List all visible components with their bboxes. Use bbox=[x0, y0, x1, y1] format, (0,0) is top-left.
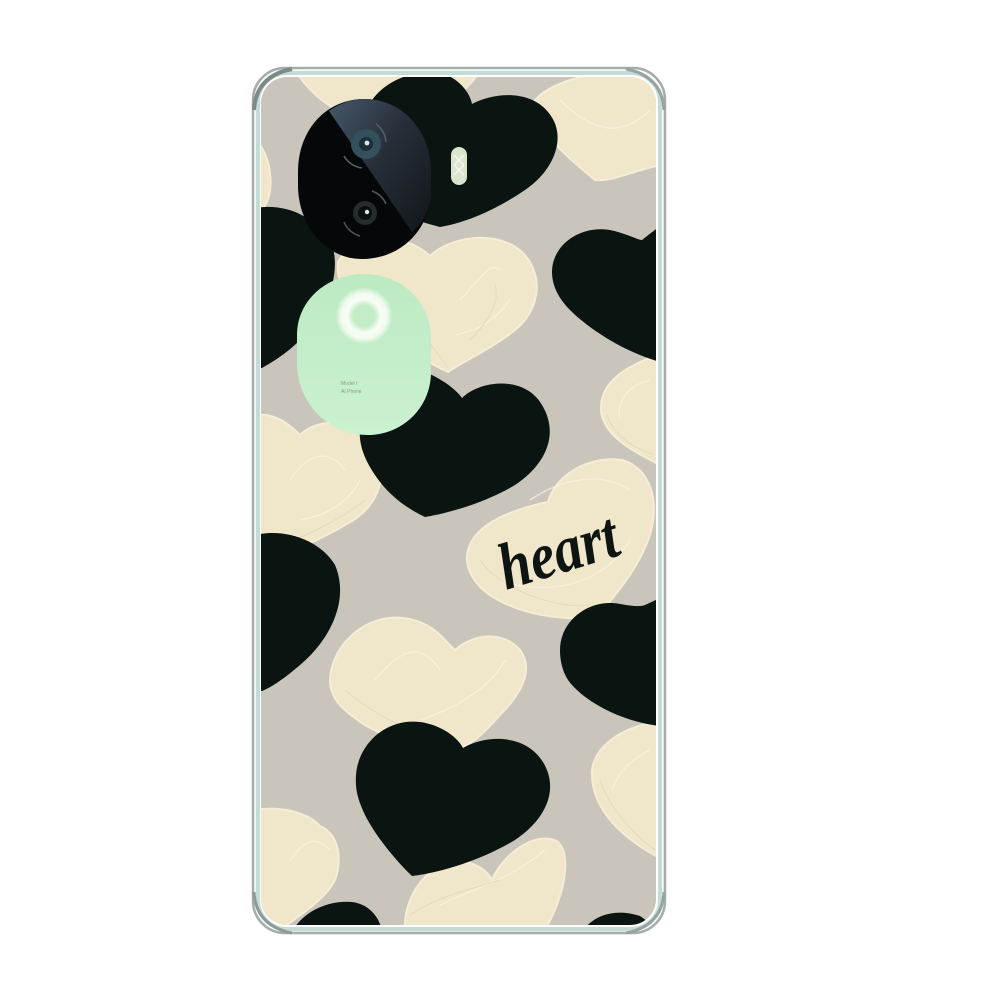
green ring light module bbox=[297, 274, 431, 435]
flash bbox=[451, 147, 467, 185]
lens top bbox=[344, 124, 386, 168]
paint strokes bbox=[290, 100, 650, 905]
fine print: AI Phone bbox=[341, 389, 362, 395]
phone case product image bbox=[252, 66, 666, 934]
heart script lettering: heart bbox=[489, 498, 628, 604]
fine print: Model / bbox=[341, 381, 357, 387]
ring light bbox=[336, 288, 392, 344]
cream hearts bbox=[255, 70, 660, 930]
printed back panel with hearts bbox=[255, 70, 660, 930]
lens bottom bbox=[344, 191, 386, 236]
camera module bbox=[298, 99, 431, 259]
black hearts bbox=[255, 72, 660, 930]
case frame bbox=[253, 68, 665, 933]
